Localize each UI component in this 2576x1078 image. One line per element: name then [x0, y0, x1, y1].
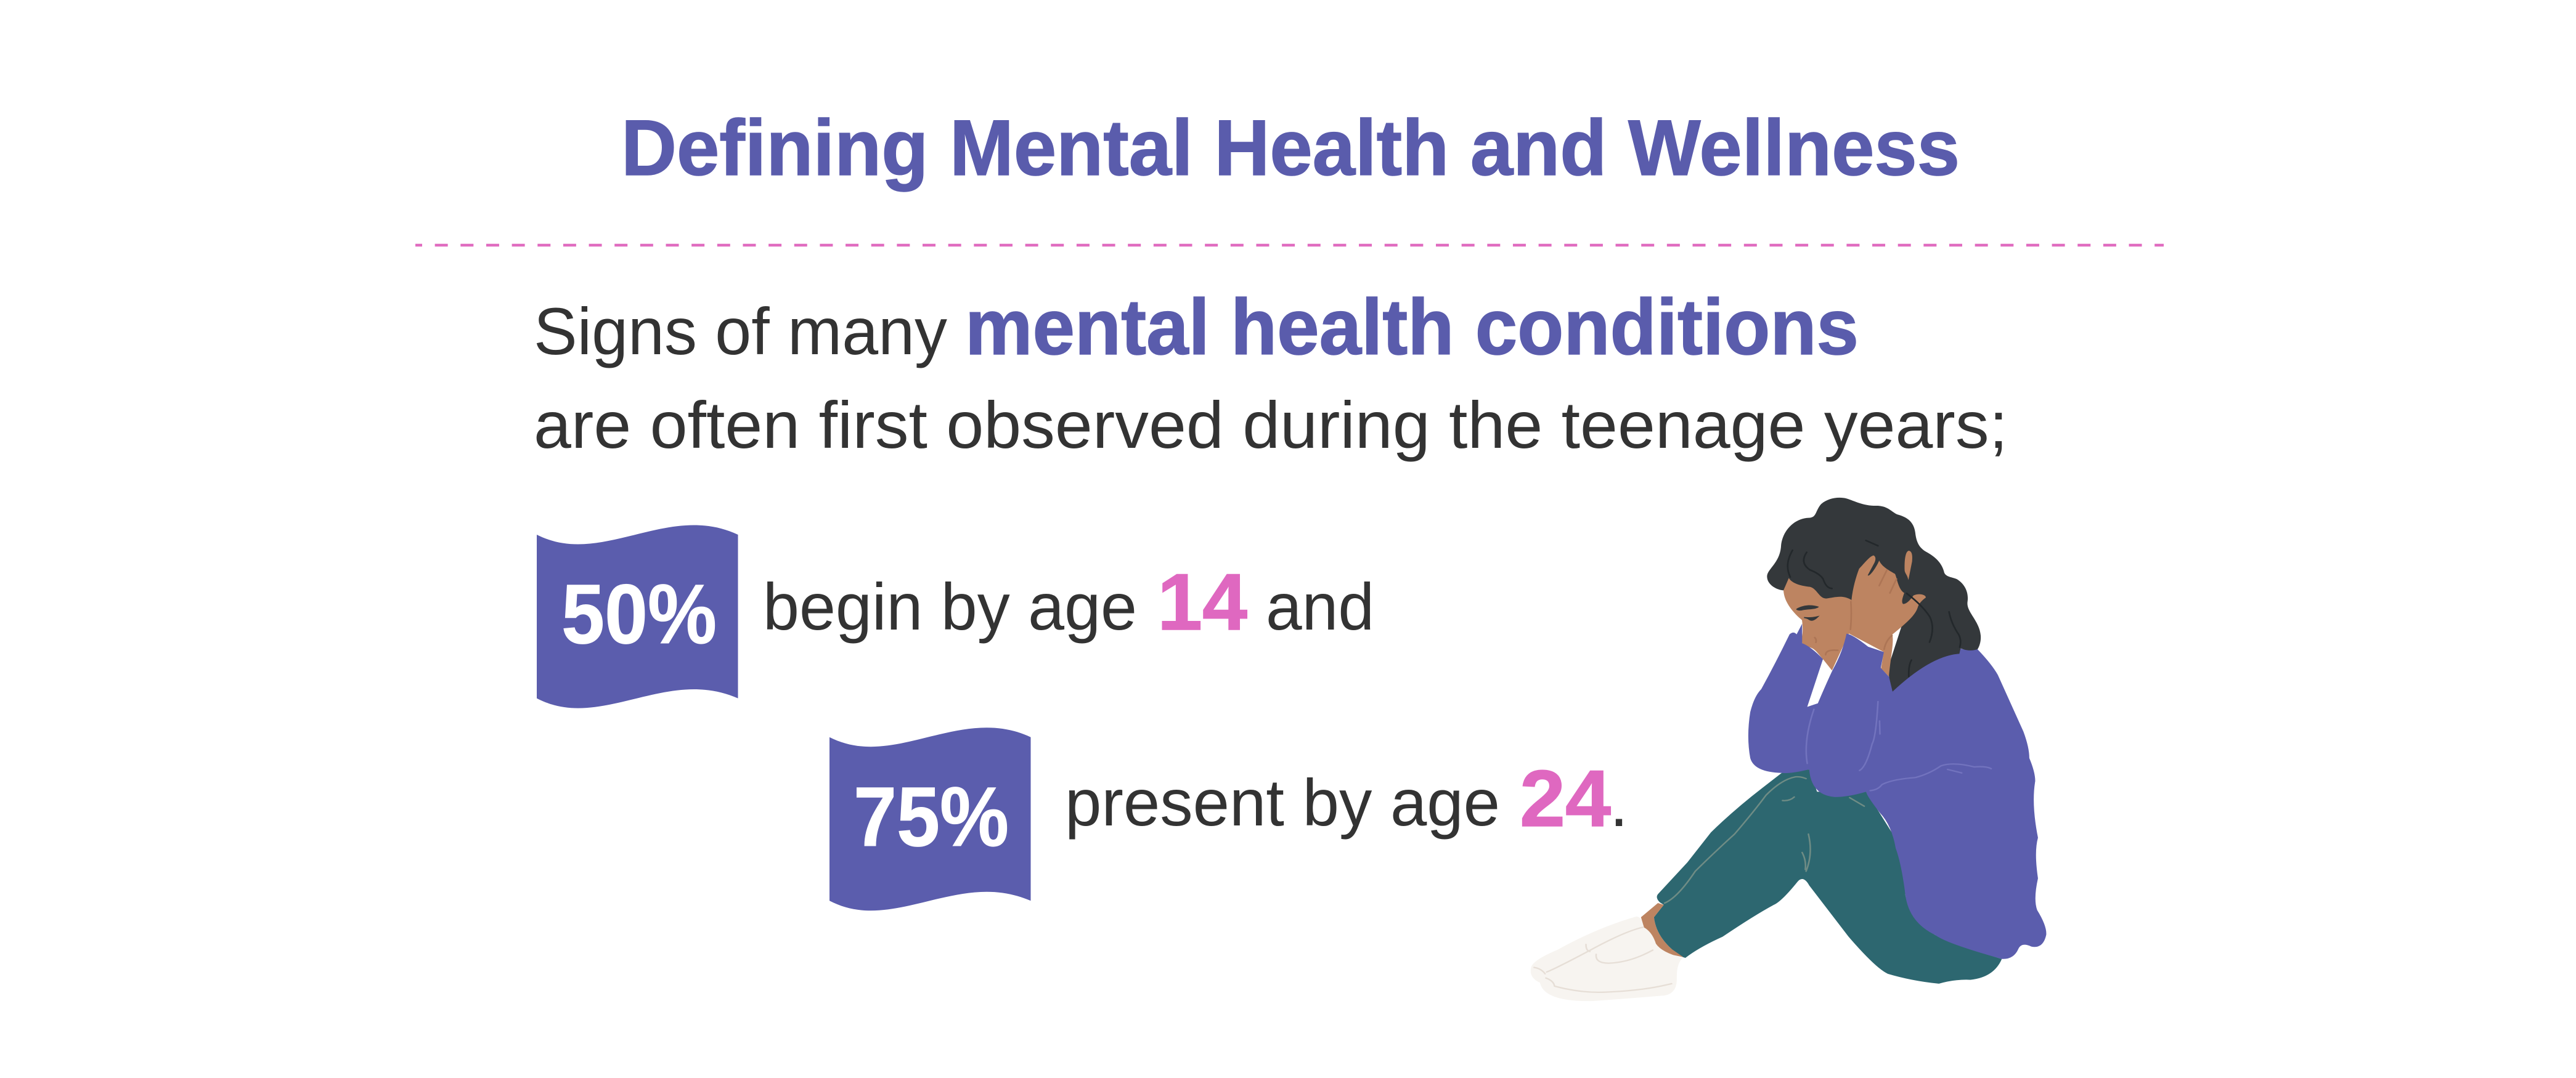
number: 24: 24: [1520, 753, 1611, 843]
ankle: [1641, 903, 1684, 957]
number: 14: 14: [1157, 557, 1247, 647]
closed eye: [1804, 615, 1820, 621]
intro line 1: mental health conditions: [965, 283, 1859, 371]
face: [1783, 578, 1851, 670]
body: [1531, 624, 2046, 1001]
intro text block: [534, 283, 2008, 462]
shoe: [1531, 917, 1682, 1001]
text: begin by age: begin by age: [763, 569, 1137, 644]
skin crease lines: [1815, 570, 1896, 655]
flag badge: 50%: 50%: [561, 567, 717, 662]
sweater detail lines: [1806, 702, 1991, 790]
flag badge: 50%: [537, 525, 738, 708]
hand: [1844, 556, 1926, 676]
flag badge: 75%: [829, 727, 1030, 910]
sweater: [1748, 624, 2046, 959]
illustration: sad seated woman holding her head: [1531, 498, 2046, 1001]
period: .: [1610, 766, 1628, 840]
pants detail lines: [1665, 777, 1864, 903]
head: [1767, 498, 1981, 692]
hair strand lines: [1788, 540, 1960, 676]
intro line 1: [534, 283, 1859, 371]
intro line 1: Signs of many: [534, 294, 947, 368]
text: present by age: present by age: [1065, 765, 1500, 840]
eyebrow: [1796, 606, 1819, 610]
intro line 2: are often first observed during the teenage years;: [534, 387, 2008, 462]
statistic row: 50%: [537, 525, 1374, 708]
text: and: and: [1266, 569, 1374, 644]
statistic row: 75%: [829, 727, 1628, 910]
hair: [1767, 498, 1981, 692]
title: Defining Mental Health and Wellness: [621, 104, 1960, 192]
pants: [1654, 769, 2002, 984]
flag badge: 75%: 75%: [854, 770, 1009, 864]
ear: [1905, 551, 1912, 580]
